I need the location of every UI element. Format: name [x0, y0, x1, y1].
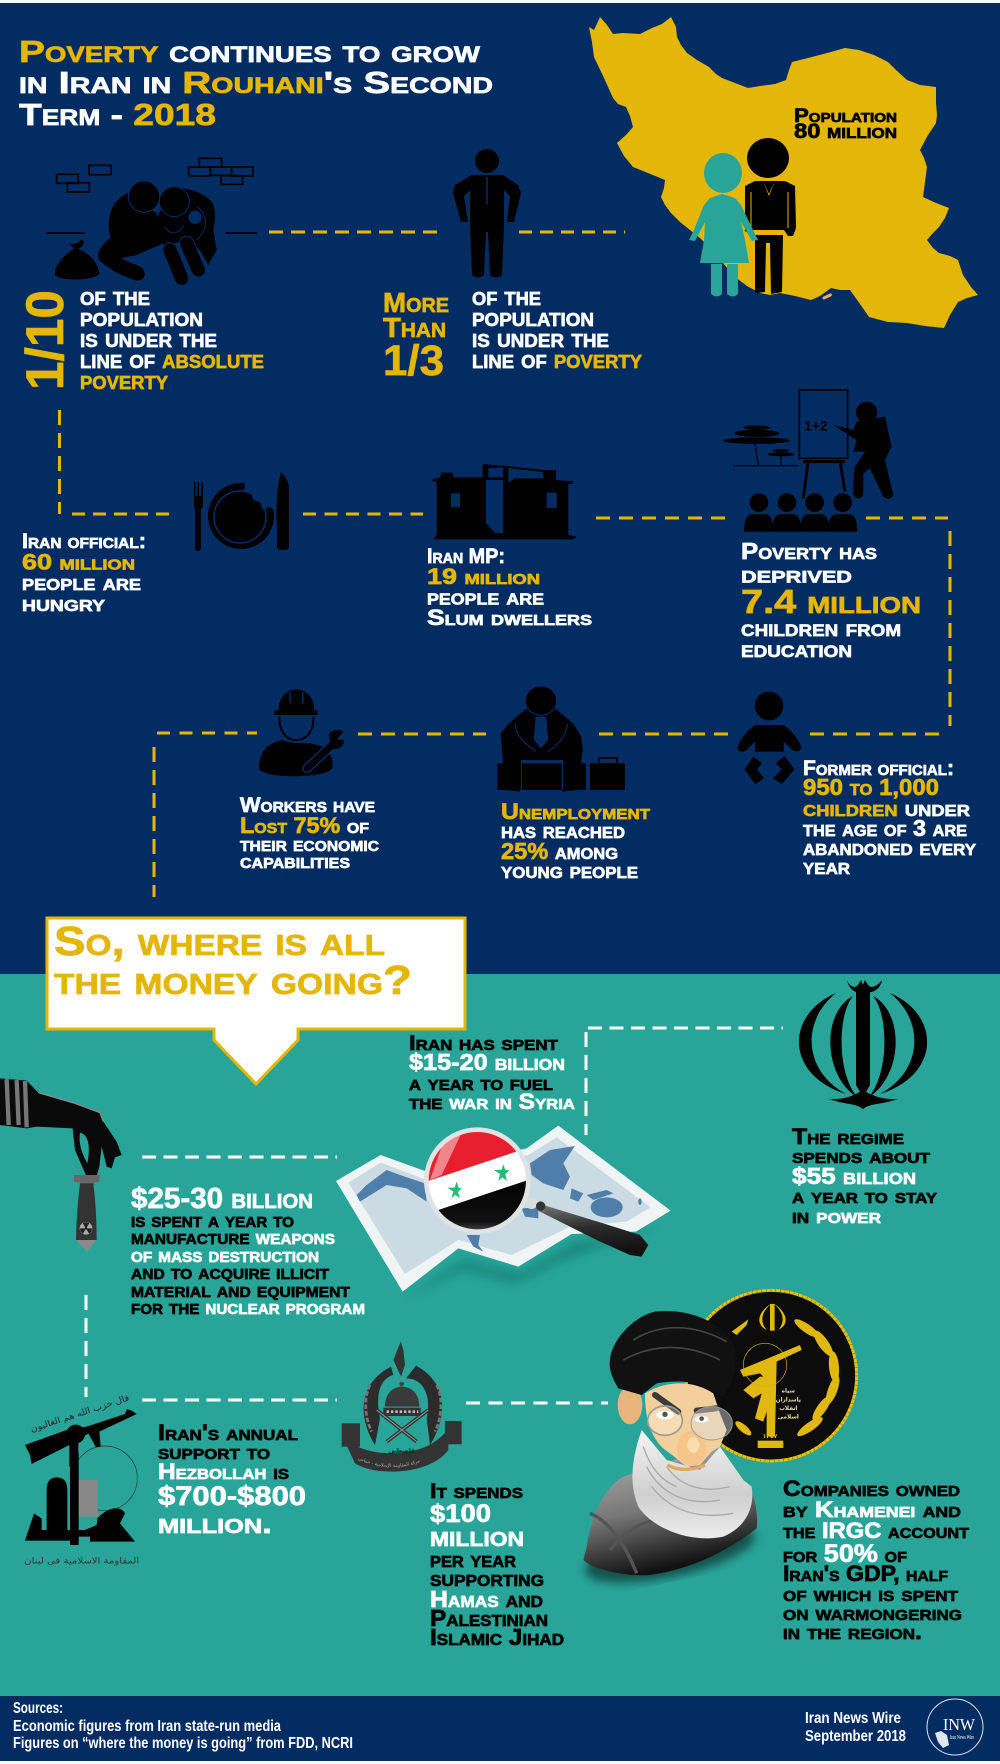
- text: Khamenei and IRGC companies: [783, 1476, 969, 1644]
- icon: IRGC badge: ۱۳۵۷: [763, 1433, 778, 1440]
- icon: IRGC badge: [686, 1290, 857, 1461]
- text: more than one third under poverty line: More: [383, 287, 449, 318]
- text: war in Syria spending: a year to fuel: [409, 1070, 553, 1095]
- text: 19 million slum dwellers: Slum dwellers: [427, 605, 592, 630]
- text: Hezbollah support: million.: [158, 1508, 272, 1539]
- text: regime spends 55 billion: in power: [792, 1203, 881, 1228]
- icon: Hezbollah logo: قال حزب الله هم الغالبون: [29, 1393, 131, 1435]
- text: one tenth under absolute poverty: line of absolute: [80, 346, 264, 374]
- text: war in Syria spending: [409, 1032, 575, 1114]
- icon: standing man with empty pockets: [453, 149, 521, 278]
- callout: where is the money going: So, where is all: [54, 918, 385, 964]
- text: Khamenei and IRGC companies: by Khamenei and: [783, 1497, 961, 1522]
- text: war in Syria spending: the war in Syria: [409, 1089, 575, 1114]
- footer: [0, 1696, 1000, 1761]
- icon: slum buildings: [433, 464, 577, 539]
- text: Hamas and Palestinian Islamic Jihad support: [430, 1480, 564, 1650]
- icon: unemployed man with briefcase: [497, 686, 625, 792]
- text: Hamas and Palestinian Islamic Jihad support: Hamas and: [430, 1586, 543, 1612]
- text: regime spends 55 billion: $55 billion: [792, 1163, 916, 1189]
- text: regime spends 55 billion: [792, 1124, 937, 1228]
- text: Hezbollah support: Hezbollah is: [158, 1459, 289, 1484]
- text: Hamas and Palestinian Islamic Jihad support: It spends: [430, 1480, 523, 1503]
- text: 60 million hungry: [22, 530, 146, 616]
- icon: hand holding nuclear bomb: [0, 1078, 122, 1252]
- callout: where is the money going: the money going?: [54, 957, 412, 1003]
- text: weapons of mass destruction spending: is spent a year to: [131, 1209, 294, 1232]
- text: 7.4 million children deprived of education: deprived: [741, 562, 852, 588]
- text: unemployment 25 percent: 25% among: [501, 838, 618, 864]
- text: more than one third under poverty line: [383, 283, 642, 385]
- text: Khamenei and IRGC companies: Iran's GDP, half: [783, 1561, 948, 1586]
- text: Khamenei and IRGC companies: of which is spent: [783, 1581, 958, 1606]
- sources: Economic figures from Iran state-run media: [13, 1718, 281, 1735]
- title: Poverty continues to grow: [19, 34, 480, 69]
- text: abandoned children: abandoned every: [803, 834, 976, 860]
- text: abandoned children: [803, 757, 976, 879]
- text: unemployment 25 percent: [501, 799, 650, 883]
- text: weapons of mass destruction spending: for the nuclear program: [131, 1296, 365, 1319]
- icon: Hamas logo: [342, 1342, 462, 1472]
- text: 7.4 million children deprived of education: Poverty has: [741, 538, 877, 564]
- text: regime spends 55 billion: spends about: [792, 1143, 930, 1168]
- icon: world map with Syrian flag under magnifier: [336, 1126, 671, 1297]
- text: Hamas and Palestinian Islamic Jihad support: per year: [430, 1546, 516, 1572]
- icon: IRGC badge: اسلامی: [778, 1415, 799, 1421]
- face: [645, 1383, 727, 1467]
- text: 19 million slum dwellers: [427, 545, 592, 630]
- icon: fork, eaten plate and knife: [194, 472, 289, 551]
- text: weapons of mass destruction spending: and to acquire illicit: [131, 1261, 329, 1284]
- robe: [583, 1447, 757, 1575]
- text: Khamenei and IRGC companies: on warmongering: [783, 1600, 962, 1625]
- icon: teacher with pupils: [723, 390, 893, 532]
- sources: Figures on “where the money is going” from FDD, NCRI: [13, 1735, 353, 1752]
- text: abandoned children: year: [803, 853, 850, 879]
- text: weapons of mass destruction spending: manufacture weapons: [131, 1226, 335, 1249]
- text: 19 million slum dwellers: people are: [427, 584, 544, 610]
- text: 60 million hungry: 60 million: [22, 550, 135, 574]
- text: 7.4 million children deprived of education: children from: [741, 615, 901, 642]
- text: unemployment 25 percent: young people: [501, 857, 638, 883]
- glasses and eyebrows: [655, 1395, 717, 1412]
- text: 7.4 million children deprived of education: education: [741, 636, 852, 663]
- title: [19, 34, 493, 132]
- icon: baby: [737, 692, 802, 784]
- text: war in Syria spending: Iran has spent: [409, 1032, 558, 1055]
- icon: IRGC badge: سپاه: [782, 1389, 795, 1395]
- icon: emblem of Iran: [799, 980, 927, 1109]
- text: workers lost 75 percent: [240, 794, 379, 873]
- text: Hamas and Palestinian Islamic Jihad support: million: [430, 1521, 524, 1552]
- connector dashes: [86, 1028, 783, 1403]
- text: abandoned children: Former official:: [803, 757, 954, 780]
- text: weapons of mass destruction spending: material and equipment: [131, 1279, 350, 1302]
- icon: Hezbollah logo: المقاومة الاسلامية فى لبنان: [24, 1556, 139, 1566]
- sources: Sources:: [13, 1700, 63, 1717]
- text: Khamenei and IRGC companies: in the region.: [783, 1619, 922, 1644]
- panel: poverty in Iran: [0, 3, 1000, 974]
- icon: woman: [689, 153, 758, 296]
- turban: [610, 1311, 736, 1397]
- ear: [618, 1386, 642, 1424]
- text: Hamas and Palestinian Islamic Jihad support: supporting: [430, 1565, 544, 1591]
- text: unemployment 25 percent: Unemployment: [501, 799, 650, 824]
- text: workers lost 75 percent: their economic: [240, 833, 379, 856]
- logo: Iran News Wire: [927, 1699, 983, 1755]
- text: weapons of mass destruction spending: [131, 1183, 365, 1319]
- text: 7.4 million children deprived of education: [741, 538, 921, 663]
- text: Hamas and Palestinian Islamic Jihad support: $100: [430, 1500, 491, 1528]
- population label: [794, 106, 897, 143]
- callout: where is the money going: [47, 918, 465, 1084]
- text: Hezbollah support: $700-$800: [158, 1481, 306, 1511]
- text: more than one third under poverty line: is under the: [472, 325, 609, 353]
- text: Hamas and Palestinian Islamic Jihad support: Islamic Jihad: [430, 1624, 564, 1650]
- text: more than one third under poverty line: line of poverty: [472, 346, 642, 374]
- text: more than one third under poverty line: of the: [472, 283, 541, 311]
- publisher and date: September 2018: [805, 1728, 906, 1745]
- text: Khamenei and IRGC companies: the IRGC account: [783, 1518, 969, 1543]
- text: workers lost 75 percent: Workers have: [240, 794, 375, 817]
- text: one tenth under absolute poverty: of the: [80, 283, 150, 311]
- icon: teacher with pupils: 1+2: [804, 418, 828, 434]
- text: 60 million hungry: people are: [22, 569, 141, 595]
- text: one tenth under absolute poverty: is under the: [80, 325, 217, 353]
- text: weapons of mass destruction spending: of mass destruction: [131, 1244, 319, 1267]
- publisher and date: [805, 1710, 906, 1745]
- text: 7.4 million children deprived of education: 7.4 million: [741, 583, 921, 620]
- icon: Hamas logo: فلسطين: [389, 1447, 415, 1454]
- logo: Iran News Wire: Iran News Wire: [950, 1735, 974, 1741]
- text: war in Syria spending: $15-20 billion: [409, 1049, 565, 1075]
- text: Khamenei and IRGC companies: for 50% of: [783, 1540, 907, 1568]
- text: weapons of mass destruction spending: $25-30 billion: [131, 1183, 313, 1215]
- logo: Iran News Wire: INW: [943, 1715, 976, 1734]
- icon: Hamas logo: حركة المقاومة الإسلامية - حماس: [358, 1458, 420, 1468]
- text: more than one third under poverty line: 1/3: [383, 337, 444, 385]
- text: one tenth under absolute poverty: poverty: [80, 367, 168, 395]
- population label: 80 million: [794, 120, 897, 143]
- map of Iran with population figures: [589, 17, 978, 328]
- beard: [632, 1430, 752, 1538]
- publisher and date: Iran News Wire: [805, 1710, 901, 1727]
- text: abandoned children: children under: [803, 795, 971, 821]
- text: one tenth under absolute poverty: population: [80, 304, 203, 332]
- text: one tenth under absolute poverty: 1/10: [16, 290, 75, 390]
- population label: Population: [794, 106, 897, 127]
- panel: where the money goes: [0, 916, 1000, 1696]
- text: workers lost 75 percent: capabilities: [240, 850, 350, 873]
- illustration: Khamenei with IRGC badge: [580, 1290, 857, 1594]
- title: Term - 2018: [19, 97, 216, 132]
- text: workers lost 75 percent: Lost 75% of: [240, 813, 369, 838]
- text: Hezbollah support: Iran's annual: [158, 1420, 298, 1445]
- sources: [13, 1700, 353, 1752]
- text: more than one third under poverty line: population: [472, 304, 594, 332]
- text: regime spends 55 billion: a year to stay: [792, 1183, 937, 1208]
- text: Hamas and Palestinian Islamic Jihad support: Palestinian: [430, 1605, 548, 1631]
- text: 19 million slum dwellers: Iran MP:: [427, 545, 505, 568]
- text: abandoned children: 950 to 1,000: [803, 774, 939, 800]
- text: 19 million slum dwellers: 19 million: [427, 564, 540, 589]
- icon: homeless people: [46, 158, 257, 281]
- icon: IRGC badge: پاسداران: [776, 1397, 801, 1403]
- text: one tenth under absolute poverty: [16, 283, 264, 395]
- connector dashes: [60, 232, 950, 897]
- text: 60 million hungry: hungry: [22, 590, 105, 616]
- icon: IRGC badge: انقلاب: [779, 1406, 797, 1412]
- text: regime spends 55 billion: The regime: [792, 1124, 904, 1149]
- text: abandoned children: the age of 3 are: [803, 815, 967, 841]
- text: more than one third under poverty line: Than: [383, 312, 446, 343]
- text: 60 million hungry: Iran official:: [22, 530, 146, 553]
- text: Khamenei and IRGC companies: Companies owned: [783, 1476, 960, 1501]
- icon: Hezbollah logo: [24, 1393, 139, 1566]
- text: unemployment 25 percent: has reached: [501, 817, 625, 843]
- icon: worker with wrench: [259, 689, 344, 776]
- text: Hezbollah support: support to: [158, 1439, 270, 1464]
- icon: man: [745, 138, 796, 294]
- text: Hezbollah support: [158, 1420, 306, 1539]
- title: in Iran in Rouhani 's Second: [19, 65, 493, 100]
